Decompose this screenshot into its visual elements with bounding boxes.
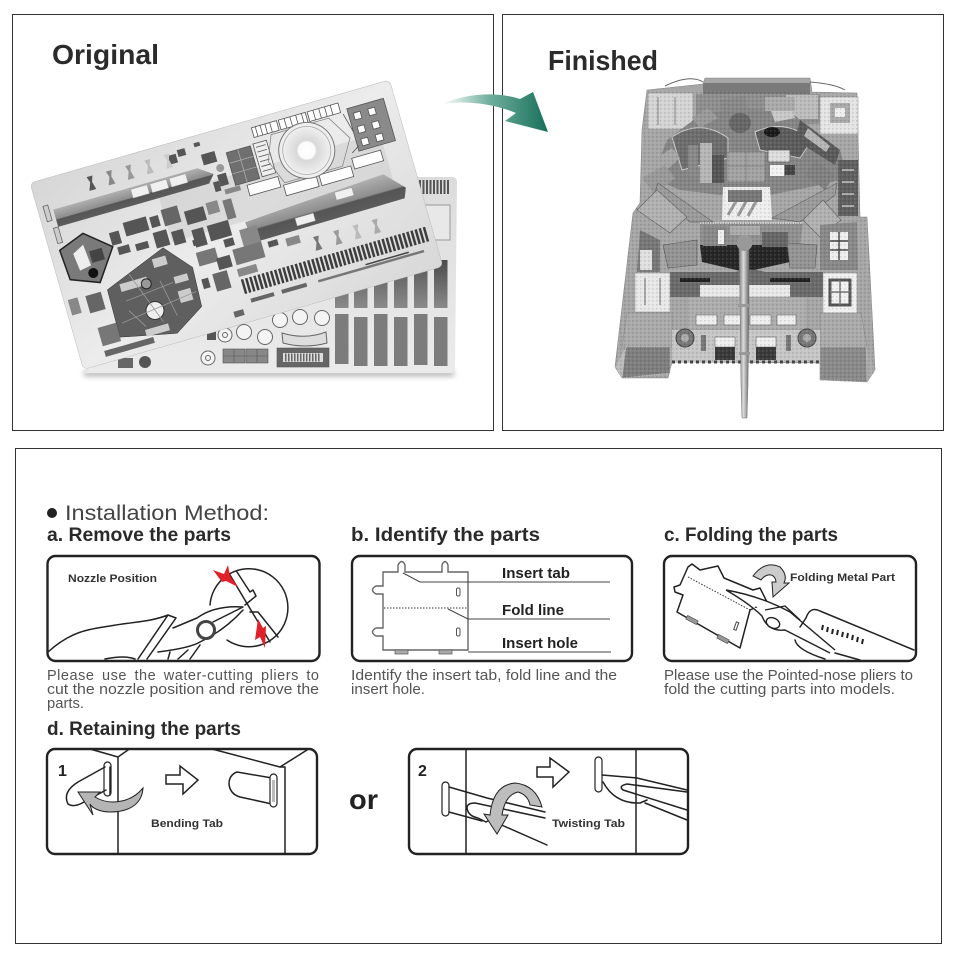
metal sheets bbox=[30, 80, 457, 376]
turret front band and dark gun well bbox=[700, 223, 803, 245]
comb strip bbox=[243, 234, 427, 287]
arrow: original to finished bbox=[442, 92, 548, 132]
diagram: parts bbox=[352, 556, 632, 661]
upper grids bbox=[222, 91, 402, 208]
scattered small parts bbox=[107, 175, 308, 316]
tank hull bbox=[615, 78, 875, 382]
heading: Original: Original bbox=[52, 39, 159, 70]
diagram: pliers: Nozzle Position bbox=[68, 573, 157, 585]
rear strip bbox=[703, 83, 810, 94]
description: b: Identify the insert tab, fold line and the bbox=[351, 668, 617, 684]
panel: original bbox=[12, 14, 494, 430]
turret bbox=[642, 96, 848, 195]
heading: c: c. Folding the parts bbox=[664, 525, 838, 546]
diagram: twisting tab bbox=[409, 749, 688, 854]
center mantlet patch bbox=[722, 187, 772, 220]
panel: finished bbox=[502, 14, 944, 430]
diagram: pliers bbox=[48, 556, 320, 661]
right side column bbox=[838, 160, 858, 216]
gun barrel bbox=[739, 248, 749, 418]
diagram: bending tab: 1 bbox=[58, 763, 67, 780]
diagram: bending tab: Bending Tab bbox=[151, 818, 223, 830]
front turret boxes bbox=[663, 240, 697, 268]
installation method heading: Installation Method: bbox=[65, 502, 269, 525]
turret disc bbox=[272, 116, 341, 185]
front fenders bbox=[622, 313, 672, 347]
step c bbox=[664, 525, 916, 698]
panel: installation method bbox=[16, 448, 942, 944]
V armour wings bbox=[655, 183, 713, 222]
diagram: twisting tab: 2 bbox=[418, 763, 427, 780]
sheet: front plate bbox=[30, 80, 443, 369]
diagram: parts: Fold line bbox=[502, 603, 564, 619]
reflection band bbox=[159, 133, 393, 242]
tank model bbox=[615, 78, 875, 418]
step a bbox=[47, 525, 320, 712]
diagram: parts: Insert hole bbox=[502, 636, 578, 652]
description: c bbox=[664, 668, 913, 698]
diagram: parts: Insert tab bbox=[502, 566, 570, 582]
description: b: insert hole. bbox=[351, 682, 425, 698]
hourglass cut-outs bbox=[86, 103, 381, 306]
step d bbox=[47, 719, 688, 854]
diagram: folding: Folding Metal Part bbox=[790, 572, 895, 584]
description: b bbox=[351, 668, 617, 698]
heading: b: b. Identify the parts bbox=[351, 525, 540, 546]
description: a: parts. bbox=[47, 696, 84, 712]
description: c: Please use the Pointed-nose pliers to bbox=[664, 668, 913, 684]
description: a: cut the nozzle position and remove the bbox=[47, 682, 319, 698]
hexagon part bbox=[57, 226, 121, 291]
turret part bbox=[100, 242, 209, 349]
diagram: twisting tab: Twisting Tab bbox=[552, 818, 625, 830]
sheet: back plate bbox=[84, 177, 457, 376]
hull side bands bbox=[53, 164, 216, 227]
description: a: Please use the water-cutting pliers to bbox=[47, 668, 319, 684]
description: a bbox=[47, 668, 319, 712]
glacis bbox=[687, 297, 807, 330]
front side panels bbox=[635, 273, 670, 312]
rear deck panels bbox=[648, 93, 693, 129]
description: c: fold the cutting parts into models. bbox=[664, 682, 895, 698]
diagram: folding bbox=[664, 556, 916, 661]
heading: d: d. Retaining the parts bbox=[47, 719, 241, 740]
tank metal texture bbox=[615, 90, 875, 382]
heading: Finished: Finished bbox=[548, 45, 658, 76]
diagram: bending tab bbox=[47, 749, 317, 854]
step b bbox=[351, 525, 632, 698]
lower left parts bbox=[41, 187, 155, 363]
label: or: or bbox=[349, 784, 378, 815]
heading: a: a. Remove the parts bbox=[47, 525, 231, 546]
